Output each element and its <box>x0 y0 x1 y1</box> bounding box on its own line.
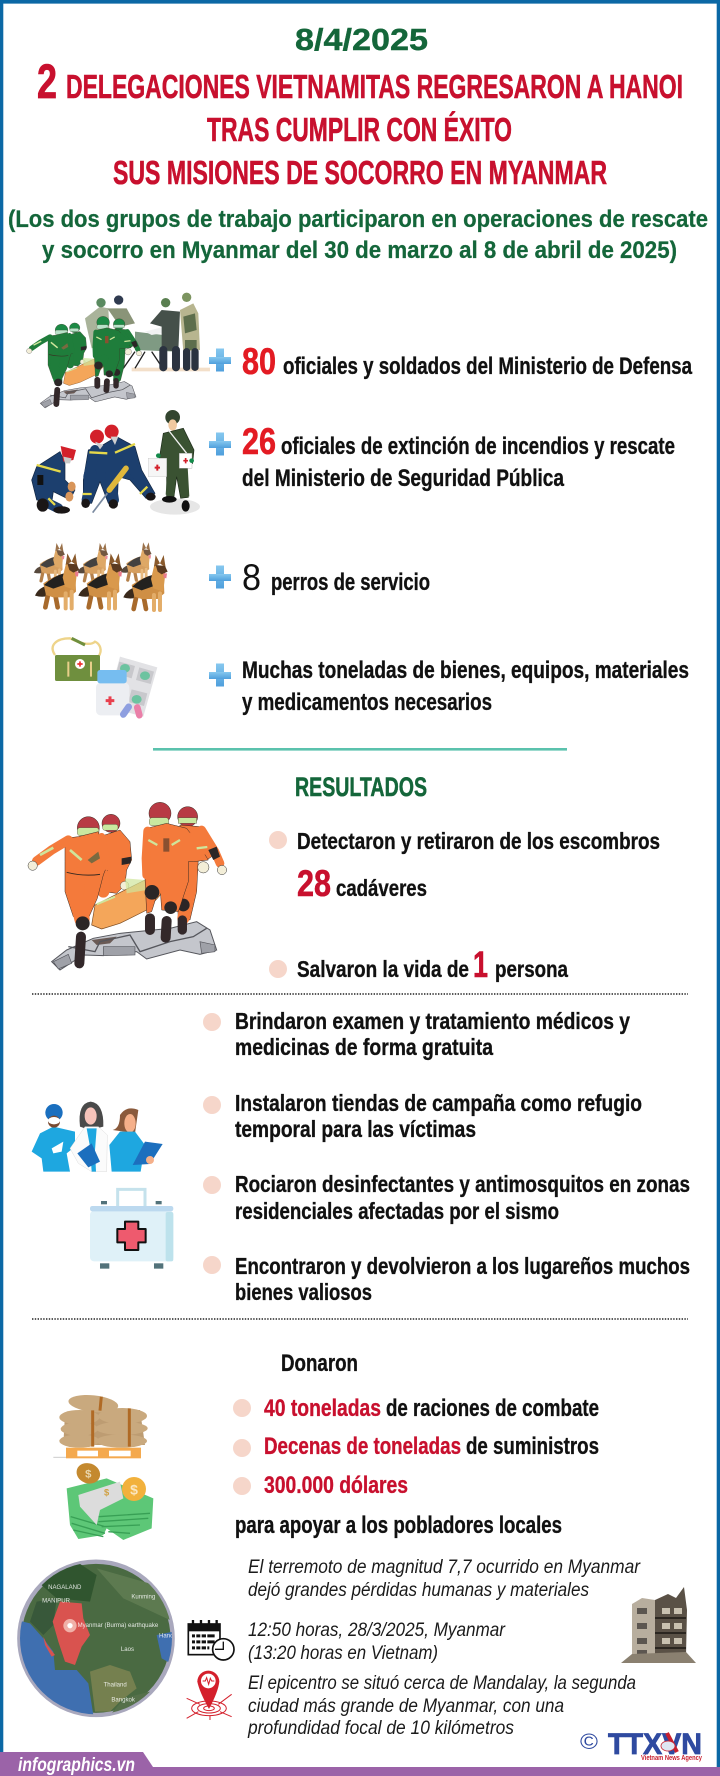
map: earthquake in Myanmar: Kunming <box>131 1594 155 1600</box>
illustration: service dogs <box>34 542 168 610</box>
bullet list: medical and shelter aid: bienes valiosos <box>235 1279 372 1305</box>
bullet list: donations <box>233 1395 599 1499</box>
illustration: medical staff <box>32 1102 163 1172</box>
text: earthquake facts: dejó grandes pérdidas humanas y materiales <box>248 1580 589 1601</box>
map: earthquake in Myanmar: Myanmar (Burma) earthquake <box>78 1623 159 1629</box>
bullet: saved: persona <box>495 956 568 982</box>
illustration: sacks on pallet <box>53 1393 148 1458</box>
text: earthquake facts: 12:50 horas, 28/3/2025, Myanmar <box>248 1620 506 1641</box>
map: earthquake in Myanmar: Laos <box>121 1647 134 1653</box>
subtitle <box>8 206 708 264</box>
text: earthquake facts: El terremoto de magnitud 7,7 ocurrido en Myanmar <box>248 1557 641 1578</box>
bullet list: donations: 300.000 dólares <box>264 1472 408 1499</box>
illustration: banknotes and coins: $ <box>85 1469 92 1481</box>
text: support locals: para apoyar a los pobladores locales <box>235 1512 562 1539</box>
bullet: detected: cadáveres <box>336 875 427 901</box>
logo: TTXVN: TTXVN <box>608 1728 702 1761</box>
item: 80 officers: 80 <box>242 341 276 382</box>
bullet: saved: 1 <box>473 944 488 985</box>
text: earthquake facts: El epicentro se situó cerca de Mandalay, la segunda <box>248 1673 636 1694</box>
map: earthquake in Myanmar: MANIPUR <box>42 1599 71 1605</box>
bullet list: medical and shelter aid: medicinas de forma gratuita <box>235 1034 493 1060</box>
title: TRAS CUMPLIR CON ÉXITO <box>207 111 512 148</box>
icon: epicenter pin <box>187 1671 232 1720</box>
bullet list: medical and shelter aid: Instalaron tiendas de campaña como refugio <box>235 1090 642 1116</box>
illustration: firefighters and medic <box>32 410 200 515</box>
subtitle: y socorro en Myanmar del 30 de marzo al 8 de abril de 2025) <box>42 237 677 264</box>
footer bar <box>0 1752 720 1776</box>
bullet: saved: Salvaron la vida de <box>297 956 469 982</box>
text: earthquake facts: ciudad más grande de Myanmar, con una <box>248 1696 564 1717</box>
bullet list: donations: de raciones de combate <box>386 1395 599 1422</box>
icon: calendar and clock <box>188 1620 234 1660</box>
footer bar: infographics.vn <box>18 1755 135 1776</box>
illustration: medical supplies <box>53 638 157 719</box>
teal divider <box>153 748 567 751</box>
heading: donaron: Donaron <box>281 1350 358 1377</box>
illustration: ruined building <box>621 1587 696 1663</box>
title: 2 <box>37 56 57 109</box>
icon: plus 2 <box>209 432 231 456</box>
item: 26 officers: 26 <box>242 421 276 462</box>
logo: TTXVN: Vietnam News Agency <box>641 1753 703 1762</box>
icon: plus 4 <box>209 664 231 686</box>
icon: plus 3 <box>209 566 231 588</box>
logo: TTXVN: © <box>580 1729 598 1754</box>
item: supplies <box>242 657 689 716</box>
illustration: banknotes and coins: $ <box>104 1488 110 1498</box>
text: earthquake facts: profundidad focal de 10 kilómetros <box>247 1718 514 1739</box>
illustration: banknotes and coins <box>67 1460 153 1540</box>
item: 8 dogs: perros de servicio <box>271 569 430 596</box>
item: 26 officers: del Ministerio de Seguridad Pública <box>242 465 565 492</box>
map: earthquake in Myanmar <box>17 1562 175 1715</box>
illustration: soldiers <box>27 293 210 408</box>
map: earthquake in Myanmar: Hanoi <box>159 1633 175 1639</box>
bullet list: medical and shelter aid: residenciales afectadas por el sismo <box>235 1198 559 1224</box>
illustration: banknotes and coins: $ <box>130 1481 138 1497</box>
bullet list: donations: 40 toneladas <box>264 1395 381 1422</box>
item: 8 dogs: 8 <box>242 557 261 598</box>
item: supplies: y medicamentos necesarios <box>242 689 492 716</box>
heading: resultados: RESULTADOS <box>295 772 427 802</box>
illustration: first aid kit <box>90 1189 173 1269</box>
illustration: rescuers in orange <box>28 802 227 970</box>
item: 80 officers <box>242 341 693 382</box>
bullet list: medical and shelter aid: Brindaron examen y tratamiento médicos y <box>235 1008 630 1034</box>
text: earthquake facts <box>247 1557 641 1739</box>
bullet: saved <box>269 944 568 985</box>
bullet: detected <box>269 828 660 904</box>
map: earthquake in Myanmar: Thailand <box>104 1683 127 1689</box>
date: 8/4/2025 <box>295 22 428 57</box>
bullet list: medical and shelter aid <box>203 1008 690 1305</box>
map: earthquake in Myanmar: NAGALAND <box>48 1585 82 1591</box>
bullet list: donations: Decenas de toneladas <box>264 1433 461 1460</box>
bullet list: medical and shelter aid: temporal para las víctimas <box>235 1116 476 1142</box>
title <box>37 56 683 191</box>
map: earthquake in Myanmar: Bangkok <box>111 1697 136 1703</box>
icon: plus 1 <box>209 348 231 372</box>
bullet: detected: 28 <box>297 863 331 904</box>
bullet list: donations: de suministros <box>466 1433 599 1460</box>
item: 8 dogs <box>242 557 430 598</box>
item: 26 officers <box>242 421 675 492</box>
text: earthquake facts: (13:20 horas en Vietnam) <box>248 1643 438 1664</box>
